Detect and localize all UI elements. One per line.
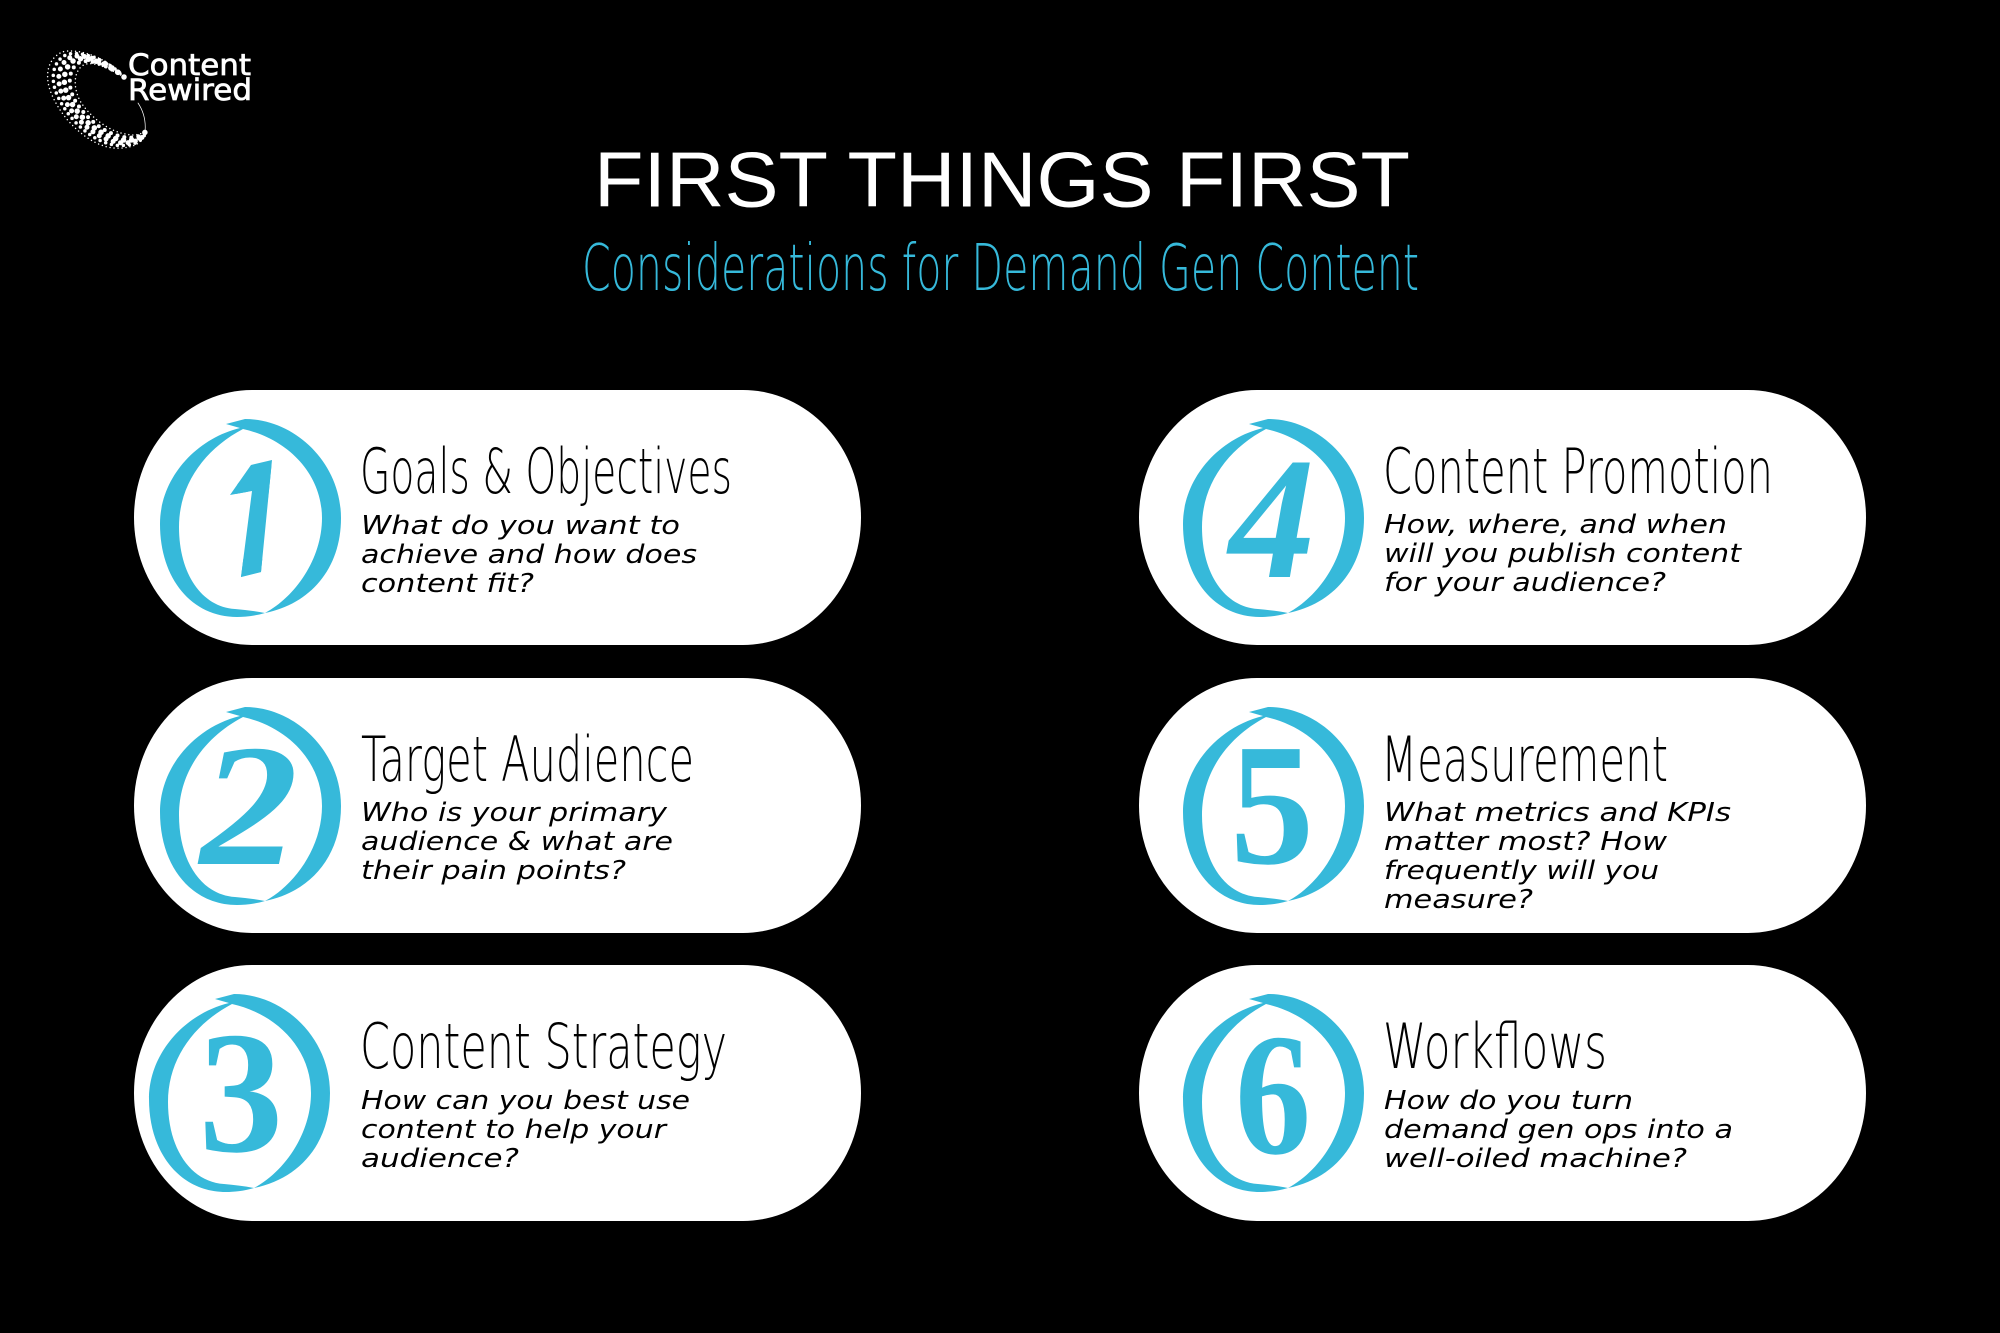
heading: Target Audience	[361, 723, 694, 796]
logo wordmark: Rewired	[128, 73, 252, 107]
icon: ring	[1183, 419, 1364, 617]
pill background	[1139, 965, 1866, 1221]
number 2: 2	[197, 709, 298, 902]
panel: 5 Measurement	[1139, 678, 1866, 933]
panel: 1 Goals & Objectives	[134, 390, 861, 645]
number 3: 3	[199, 996, 283, 1189]
heading: Content Strategy	[360, 1010, 727, 1083]
description: What metrics and KPIs	[1384, 798, 1731, 828]
number 4: 4	[1226, 422, 1315, 615]
description: Who is your primary	[361, 798, 668, 828]
logo icon: dotted swoosh	[48, 51, 145, 148]
icon: ring	[1183, 994, 1364, 1192]
description	[361, 798, 673, 886]
subtitle: Considerations for Demand Gen Content	[582, 232, 1419, 306]
description	[361, 1086, 690, 1174]
title: FIRST THINGS FIRST	[594, 136, 1410, 224]
description: How do you turn	[1384, 1086, 1633, 1116]
pill background	[134, 390, 861, 645]
description: audience & what are	[361, 827, 673, 857]
description: How, where, and when	[1384, 510, 1727, 540]
panel: 4 Content Promotion	[1139, 390, 1866, 645]
description: demand gen ops into a	[1384, 1115, 1733, 1145]
number 6: 6	[1235, 998, 1311, 1191]
logo wordmark: Content	[128, 48, 251, 82]
pill background	[1139, 678, 1866, 933]
icon: ring	[160, 707, 341, 905]
icon: ring	[149, 994, 330, 1192]
description	[1384, 510, 1742, 598]
panel: 2 Target Audience	[134, 678, 861, 933]
panel: 6 Workflows	[1139, 965, 1866, 1221]
description: How can you best use	[361, 1086, 690, 1116]
description	[1384, 1086, 1733, 1174]
heading: Measurement	[1381, 723, 1668, 796]
description: measure?	[1384, 885, 1533, 915]
description: their pain points?	[361, 856, 626, 886]
heading: Workflows	[1383, 1010, 1607, 1083]
number 5: 5	[1230, 708, 1314, 901]
number 1: 1	[223, 431, 283, 612]
pill background	[134, 678, 861, 933]
description: frequently will you	[1384, 856, 1659, 886]
heading: Goals & Objectives	[360, 435, 732, 508]
pill background	[134, 965, 861, 1221]
description: matter most? How	[1384, 827, 1668, 857]
description: achieve and how does	[361, 540, 697, 570]
icon: ring	[160, 419, 341, 617]
description: content to help your	[361, 1115, 669, 1145]
description	[1384, 798, 1731, 915]
description: audience?	[361, 1144, 519, 1174]
panel: 3 Content Strategy	[134, 965, 861, 1221]
logo: Content Rewired	[48, 48, 252, 148]
logo wordmark	[128, 48, 252, 107]
pill background	[1139, 390, 1866, 645]
icon: ring	[1183, 707, 1364, 905]
description: content fit?	[361, 569, 534, 599]
description: What do you want to	[361, 511, 680, 541]
description: well-oiled machine?	[1384, 1144, 1687, 1174]
description: will you publish content	[1384, 539, 1742, 569]
description	[361, 511, 697, 599]
description: for your audience?	[1384, 568, 1666, 598]
heading: Content Promotion	[1383, 435, 1773, 508]
